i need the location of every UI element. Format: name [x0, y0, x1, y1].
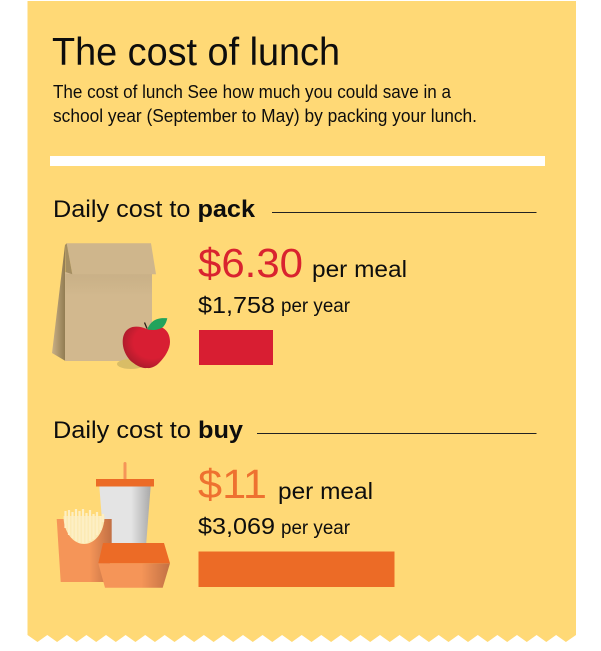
price: buy per meal: $11 — [198, 461, 267, 507]
price: pack per year: $1,758 — [198, 292, 275, 318]
price: buy per meal — [198, 461, 373, 507]
heading: daily cost to pack: Daily cost to pack — [53, 196, 256, 223]
price: buy per year: $3,069 — [198, 513, 275, 539]
title: The cost of lunch — [52, 31, 340, 74]
price: pack per meal — [198, 240, 407, 286]
price: pack per meal: $6.30 — [198, 240, 303, 286]
price: buy per meal: per meal — [278, 478, 373, 504]
text block: introduction — [53, 82, 477, 126]
price: buy per year: per year — [281, 518, 351, 539]
bar: buy yearly cost — [198, 552, 394, 587]
icon: fries — [57, 509, 112, 582]
icon: apple — [117, 318, 170, 369]
price: buy per year — [198, 513, 351, 539]
icon: paper bag and apple — [52, 243, 170, 369]
icon: drink cup — [96, 462, 154, 546]
icon: burger box — [98, 543, 170, 588]
bar: pack yearly cost — [199, 330, 273, 365]
text block: introduction: The cost of lunch See how much you could save in a — [53, 82, 452, 102]
price: pack per meal: per meal — [312, 256, 407, 282]
text block: introduction: school year (September to May) by packing your lunch. — [53, 106, 477, 126]
icon: paper bag — [52, 243, 156, 361]
price: pack per year — [198, 292, 351, 318]
icon: fast food — [57, 462, 170, 588]
price: pack per year: per year — [281, 296, 351, 317]
heading: daily cost to buy: Daily cost to buy — [53, 417, 244, 444]
